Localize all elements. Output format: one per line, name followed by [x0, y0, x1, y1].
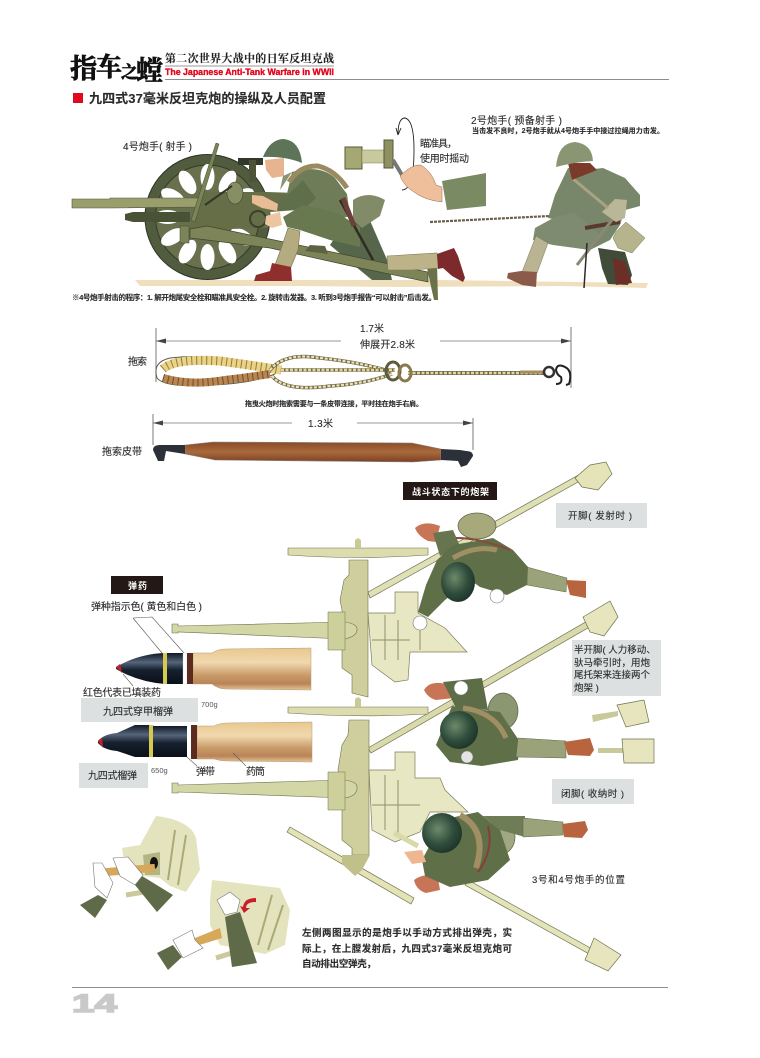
leg [483, 816, 525, 837]
heading box text: 战斗状态下的炮架 [412, 486, 489, 497]
pack [458, 513, 496, 539]
helmet [440, 711, 478, 749]
rear boot [437, 248, 465, 282]
torso [286, 169, 350, 222]
sleeve right [225, 912, 257, 967]
pack [487, 820, 515, 854]
bolt [216, 952, 235, 958]
dimension: 1.3 m [153, 414, 473, 450]
hands [413, 616, 427, 630]
header [70, 47, 669, 88]
glove lower [173, 930, 203, 958]
torso [422, 812, 510, 887]
rope [460, 815, 480, 868]
label: tow strap: 拖索皮带 [102, 445, 142, 458]
right boot [564, 738, 594, 756]
sleeve right [135, 876, 173, 912]
soldier top view: closed, gunners 3 and 4 [394, 812, 621, 971]
barrel [172, 622, 357, 639]
sleeve left [80, 895, 107, 918]
shell: AP high explosive [116, 648, 311, 690]
ammunition heading box [111, 576, 163, 594]
half open text: 驮马牵引时，用炮 [574, 657, 651, 669]
boot [507, 271, 537, 287]
label: cartridge case: 药筒 [246, 765, 265, 778]
section heading [73, 91, 326, 106]
footnote: firing procedure: ※4号炮手射击的程序：1. 解开炮尾安全栓和瞄准具安全栓。2. 旋转击发器。3. 听到3号炮手报告“可以射击”后击发。 [72, 292, 436, 302]
name box: HE shell [79, 763, 148, 788]
thigh [533, 213, 600, 250]
shin [275, 228, 300, 267]
note: gunner 2: 当击发不良时，2号炮手就从4号炮手手中接过拉绳用力击发。 [472, 126, 664, 135]
HE shell name: 九四式榴弹 [88, 769, 137, 782]
sleeve left [157, 945, 182, 970]
hand on sight [400, 165, 486, 210]
gun top view: half open [172, 601, 654, 904]
gun wheel [145, 154, 270, 280]
shovel [602, 199, 627, 222]
torso [436, 706, 520, 766]
leg [527, 567, 567, 592]
breech block [122, 816, 200, 892]
label: sight use: 使用时摇动 [420, 152, 469, 165]
dimension label: 1.7米 [360, 322, 384, 335]
hand [404, 850, 426, 864]
trail [368, 472, 587, 598]
trail spade [585, 938, 621, 971]
label: indicator color: 弹种指示色( 黄色和白色 ) [91, 600, 202, 613]
face [265, 158, 284, 178]
helmet [422, 813, 462, 853]
page number: 14 [72, 990, 117, 1018]
soldier no.4 [252, 139, 465, 282]
label: sight: 瞄准具， [420, 138, 457, 150]
rear leg [330, 216, 392, 280]
leader lines [123, 617, 184, 686]
half open text: 炮架 ) [574, 682, 599, 694]
weight 700g: 700g [201, 700, 218, 709]
trail spade [575, 462, 612, 490]
right boot [566, 580, 586, 598]
Chinese series title: 第二次世界大战中的日军反坦克战 [165, 50, 334, 66]
dimension: 1.7 m [156, 327, 571, 388]
bolt [126, 892, 144, 895]
glove left [93, 863, 113, 898]
boot [415, 523, 440, 542]
rotation arrow [396, 118, 414, 190]
spade 2 [617, 700, 649, 727]
calligraphy title: 之 [121, 58, 138, 83]
illustration: gun crew side view [72, 114, 664, 302]
breech [369, 752, 468, 842]
leader lines [187, 753, 246, 766]
half open text: 尾托架来连接两个 [574, 669, 651, 681]
panel: ammunition [79, 576, 312, 788]
rope [463, 708, 506, 738]
note: manual shell ejection: 际上，在上膛发射后，九四式37毫米反坦克炮可 [302, 943, 512, 955]
torso [418, 538, 528, 617]
torso [548, 168, 640, 250]
trail spade [583, 601, 618, 636]
heading box: carriage in combat [403, 482, 497, 500]
gun trail [190, 226, 428, 282]
AP shell name: 九四式穿甲榴弹 [103, 705, 173, 718]
helmet [556, 142, 593, 167]
label: red meaning: 红色代表已填装药 [83, 686, 161, 699]
dimension label: 1.3米 [308, 417, 333, 430]
label box: half open trails [572, 640, 661, 696]
open trails text: 开脚( 发射时 ) [568, 510, 632, 522]
label: tow rope: 拖索 [128, 355, 147, 368]
calligraphy title: 螳 [136, 49, 163, 88]
lower shield [287, 827, 414, 904]
strap and belt [340, 200, 373, 260]
rope pad [289, 166, 347, 188]
weight 650g: 650g [151, 766, 168, 775]
rope illustration [156, 356, 570, 388]
gun barrel and breech [72, 143, 297, 243]
tow strap diagram [102, 414, 473, 467]
boot [414, 875, 440, 893]
spade 3 [622, 739, 654, 763]
ground [135, 280, 648, 288]
neck [568, 163, 597, 180]
note: manual shell ejection: 自动排出空弹壳， [302, 958, 376, 970]
label: gunner 2: 2号炮手( 预备射手 ) [471, 114, 562, 127]
name box: AP shell [81, 698, 198, 722]
shell [190, 928, 222, 947]
shoulder strap [572, 178, 608, 208]
closed trails text: 闭脚( 收纳时 ) [561, 788, 624, 800]
stub 3 [598, 748, 625, 753]
note: manual shell ejection: 左侧两图显示的是炮手以手动方式排出弹壳，实 [302, 927, 512, 939]
helmet [441, 562, 475, 602]
arm [443, 678, 488, 710]
rope caption: 拖曳火炮时拖索需要与一条皮带连接，平时挂在炮手右肩。 [245, 399, 423, 408]
dimension label extended: 伸展开2.8米 [360, 338, 415, 351]
leg [516, 738, 566, 758]
half open text: 半开脚( 人力移动、 [574, 644, 656, 656]
gloves [454, 681, 468, 695]
pack [488, 693, 518, 729]
gun top view: open [172, 462, 612, 697]
barrel [172, 780, 357, 798]
calligraphy title: 车 [96, 47, 122, 84]
bag [613, 222, 645, 253]
label box: open trails [556, 503, 647, 528]
rope on shoulder [453, 549, 497, 558]
heading text: 九四式37毫米反坦克炮的操纵及人员配置 [89, 91, 326, 106]
illustration: shell ejection step 2 [157, 880, 290, 970]
helmet [263, 139, 302, 163]
shin [522, 236, 548, 273]
red arrow [240, 898, 256, 913]
folded spades [592, 711, 618, 722]
trail [465, 880, 594, 955]
gun handle [394, 833, 418, 846]
calligraphy title: 指 [70, 47, 97, 86]
English series title: The Japanese Anti-Tank Warfare in WWII [165, 67, 334, 77]
label: gunner 4: 4号炮手( 射手 ) [123, 140, 192, 153]
rear shin [387, 253, 439, 270]
left hook [153, 445, 185, 461]
lower right leg [598, 248, 632, 285]
tow rope [430, 216, 550, 222]
right boot [562, 821, 588, 838]
right hook [441, 449, 473, 467]
label box: closed trails [552, 779, 634, 804]
breech [368, 592, 467, 682]
carriage [338, 720, 369, 855]
soldier top view: open [413, 513, 586, 630]
hands [252, 195, 278, 211]
label: gunners 3 and 4 position: 3号和4号炮手的位置 [532, 874, 625, 886]
arm upper [433, 530, 460, 556]
shell: high explosive [98, 722, 312, 762]
soldier no.2 [507, 142, 645, 288]
boot [424, 683, 454, 700]
trail [368, 616, 600, 753]
shield [288, 548, 428, 558]
front thigh [283, 205, 360, 247]
illustration: shell ejection step 1 [80, 816, 200, 918]
shield [288, 707, 428, 716]
soldier top view: half open [424, 678, 594, 766]
shell [105, 864, 155, 876]
arm [276, 180, 316, 210]
carriage [340, 560, 368, 697]
belt [585, 222, 620, 228]
red square [73, 93, 83, 103]
glove upper [217, 892, 240, 915]
front boot [254, 263, 292, 281]
sight detail [345, 140, 402, 175]
tow rope diagram [128, 322, 571, 408]
leather strap [185, 442, 441, 462]
label: driving band: 弹带 [196, 765, 215, 778]
breech block [210, 880, 290, 954]
ammunition heading: 弹药 [128, 580, 147, 591]
glove right [113, 857, 143, 885]
pack [353, 195, 385, 228]
